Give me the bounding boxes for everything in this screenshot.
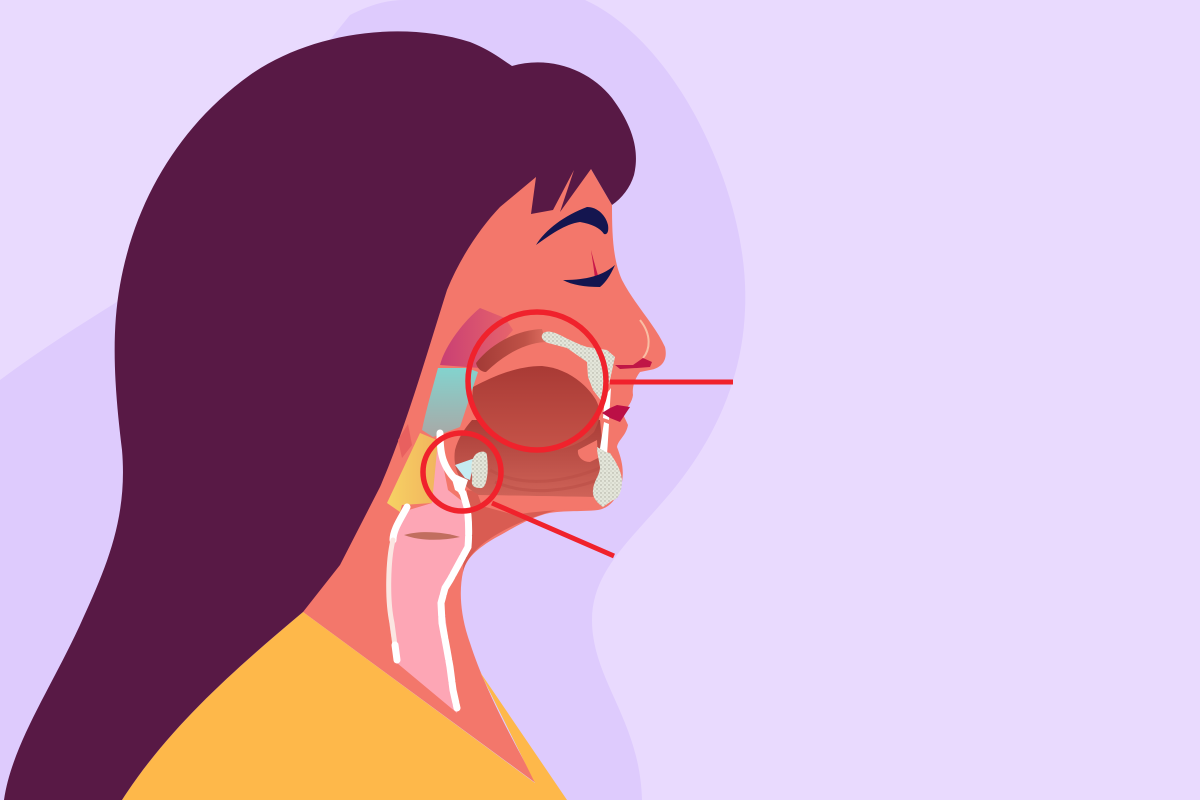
upper teeth bbox=[603, 388, 611, 420]
shirt bbox=[122, 612, 567, 800]
vocal fold bbox=[404, 532, 460, 540]
airway lining front bbox=[441, 493, 469, 708]
nose line bbox=[640, 320, 649, 358]
red callout: small circle and line bbox=[423, 433, 614, 556]
hair bbox=[4, 31, 636, 800]
small muted patch bbox=[398, 424, 412, 458]
yellow laryngeal patch bbox=[387, 433, 445, 512]
lower jaw cavity bbox=[454, 420, 604, 497]
soft palate patch bbox=[440, 308, 513, 368]
skin: face and neck bbox=[300, 169, 666, 784]
red callout: large circle and line bbox=[468, 312, 733, 450]
lower teeth bbox=[599, 422, 609, 455]
crease line bbox=[591, 250, 599, 279]
white airway lining top bbox=[440, 433, 462, 492]
neck shadow under jaw bbox=[463, 490, 565, 572]
palate ridge band bbox=[476, 329, 546, 372]
upper lip bbox=[615, 358, 652, 369]
background blob bbox=[0, 0, 745, 800]
jaw floor bbox=[478, 495, 600, 515]
palate speckle bbox=[542, 332, 615, 403]
airway lining back bbox=[393, 507, 407, 540]
eyebrow bbox=[536, 207, 608, 245]
lower lip bbox=[602, 405, 630, 422]
epiglottis speckle bbox=[471, 452, 488, 488]
tongue tip bbox=[578, 440, 598, 462]
epiglottis blue bbox=[455, 458, 475, 480]
teal nasopharynx patch bbox=[422, 368, 478, 437]
chin speckle bbox=[593, 447, 622, 507]
tongue bbox=[472, 366, 600, 452]
eye lash bbox=[563, 265, 615, 287]
pink airway bbox=[387, 440, 468, 713]
